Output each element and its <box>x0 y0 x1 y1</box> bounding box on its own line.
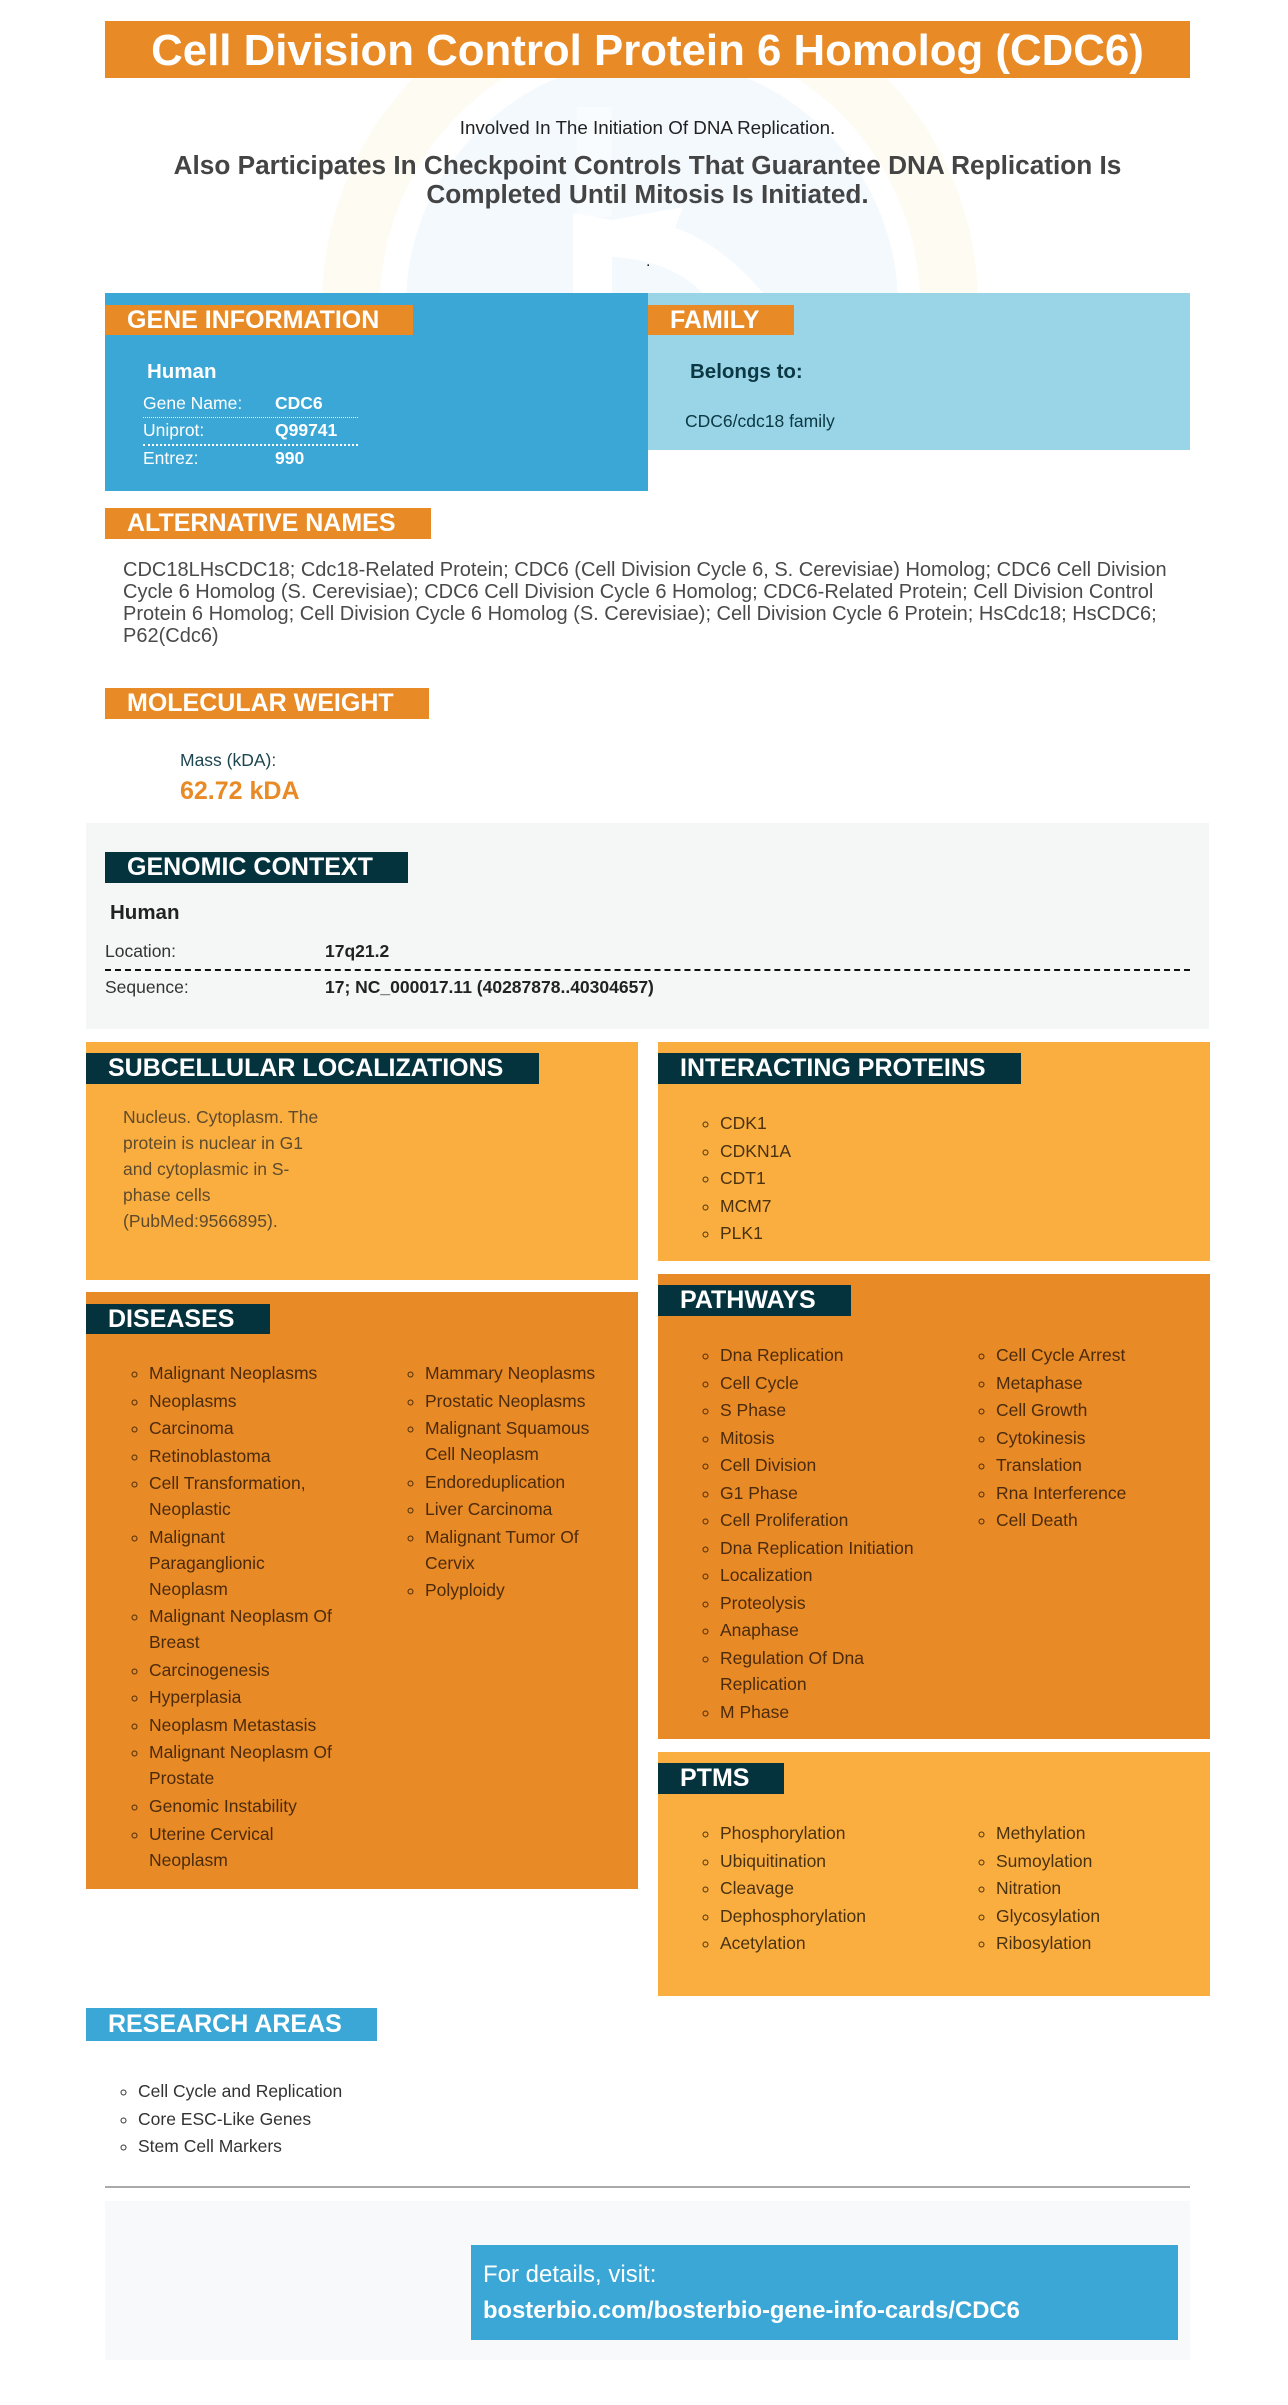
heading: pathways <box>658 1285 851 1316</box>
callout label: For details, visit: <box>483 2261 656 2288</box>
list: proteins <box>702 1113 791 1243</box>
callout url: bosterbio.com/bosterbio-gene-info-cards/CDC6 <box>483 2297 1020 2324</box>
list: diseases column 1: Cell Transformation, <box>149 1473 306 1493</box>
list: ptms column 1: Phosphorylation <box>720 1823 846 1843</box>
summary highlight <box>174 150 1121 209</box>
heading: family <box>648 305 794 335</box>
text: alternative names: CDC18LHsCDC18; Cdc18-Related Protein; CDC6 (Cell Division Cycle 6, S. Cerevisiae) Homolog; CDC6 Cell Division <box>123 559 1167 581</box>
list: pathways column 1: Mitosis <box>720 1428 774 1448</box>
list: diseases column 1: Retinoblastoma <box>149 1446 271 1466</box>
panel: gene information <box>105 293 648 491</box>
text: localization: phase cells <box>123 1185 211 1205</box>
list: ptms column 1: Acetylation <box>720 1933 806 1953</box>
text: alternative names: Protein 6 Homolog; Cell Division Cycle 6 Homolog (S. Cerevisiae); Cell Division Cycle 6 Protein; HsCdc18; HsCDC6; <box>123 603 1157 625</box>
list: research areas: Stem Cell Markers <box>138 2136 282 2156</box>
text: localization: protein is nuclear in G1 <box>123 1133 303 1153</box>
heading: ptms <box>658 1763 784 1794</box>
summary line: Involved In The Initiation Of DNA Replication. <box>460 117 835 138</box>
list: ptms column 1: Ubiquitination <box>720 1851 826 1871</box>
list: diseases column 1: Carcinoma <box>149 1418 234 1438</box>
list: pathways column 1: Dna Replication Initiation <box>720 1538 914 1558</box>
mass label: Mass (kDA): <box>180 750 276 770</box>
list: diseases column 2: Cell Neoplasm <box>425 1444 539 1464</box>
list: diseases column 1 <box>132 1363 332 1870</box>
list: diseases column 1: Breast <box>149 1632 200 1652</box>
list: diseases column 2: Endoreduplication <box>425 1472 565 1492</box>
list: ptms column 2: Nitration <box>996 1878 1061 1898</box>
list: pathways column 1: Cell Division <box>720 1455 816 1475</box>
list: pathways column 1: M Phase <box>720 1702 789 1722</box>
list: pathways column 1: Localization <box>720 1565 812 1585</box>
heading: interacting proteins: INTERACTING PROTEINS <box>680 1054 986 1082</box>
list: diseases column 1: Malignant Neoplasms <box>149 1363 317 1383</box>
text: localization <box>123 1107 318 1231</box>
list: diseases column 1: Hyperplasia <box>149 1687 241 1707</box>
list: diseases column 1: Malignant <box>149 1527 225 1547</box>
list: proteins: CDT1 <box>720 1168 766 1188</box>
text: alternative names: Cycle 6 Homolog (S. Cerevisiae); CDC6 Cell Division Cycle 6 Homolog; CDC6-Related Protein; Cell Division Control <box>123 581 1153 603</box>
list: pathways column 1 <box>702 1345 914 1722</box>
small dot: . <box>646 253 650 270</box>
heading: alternative names: ALTERNATIVE NAMES <box>127 509 396 537</box>
heading: ptms: PTMS <box>680 1764 749 1792</box>
uniprot row: Q99741 <box>275 420 337 440</box>
list: diseases column 1: Genomic Instability <box>149 1796 297 1816</box>
list: ptms column 1: Cleavage <box>720 1878 794 1898</box>
list: ptms column 1: Dephosphorylation <box>720 1906 866 1926</box>
list: ptms column 1 <box>702 1823 866 1953</box>
uniprot row: Uniprot: <box>143 420 204 440</box>
list: pathways column 1: Dna Replication <box>720 1345 844 1365</box>
list: diseases column 1: Neoplastic <box>149 1499 231 1519</box>
callout: details link <box>471 2245 1178 2340</box>
summary highlight: Also Participates In Checkpoint Controls That Guarantee DNA Replication Is <box>174 150 1121 180</box>
panel: interacting proteins <box>658 1042 1210 1261</box>
list: diseases column 2: Liver Carcinoma <box>425 1499 552 1519</box>
list: pathways column 2: Cell Growth <box>996 1400 1087 1420</box>
panel: subcellular localizations <box>86 1042 638 1280</box>
summary highlight: Completed Until Mitosis Is Initiated. <box>426 179 869 209</box>
background watermark logo <box>322 78 978 293</box>
list: pathways column 1: Cell Cycle <box>720 1373 799 1393</box>
panel: genomic context <box>86 823 1209 1029</box>
gene name row <box>143 390 358 418</box>
list: ptms column 2: Methylation <box>996 1823 1086 1843</box>
location row <box>105 938 1190 971</box>
list: diseases column 2: Cervix <box>425 1553 475 1573</box>
list: research areas: Cell Cycle and Replication <box>138 2081 342 2101</box>
sequence row: Sequence: <box>105 977 189 997</box>
list: ptms column 2 <box>978 1823 1100 1953</box>
heading: research areas: RESEARCH AREAS <box>108 2010 342 2038</box>
text: localization: Nucleus. Cytoplasm. The <box>123 1107 318 1127</box>
list: proteins: MCM7 <box>720 1196 772 1216</box>
gene name row: CDC6 <box>275 393 323 413</box>
title banner: Cell Division Control Protein 6 Homolog (CDC6) <box>151 26 1144 75</box>
list: diseases column 1: Malignant Neoplasm Of <box>149 1742 332 1762</box>
sequence row: 17; NC_000017.11 (40287878..40304657) <box>325 977 654 997</box>
list: diseases column 1: Uterine Cervical <box>149 1824 273 1844</box>
list: pathways column 1: G1 Phase <box>720 1483 798 1503</box>
list: ptms column 2: Ribosylation <box>996 1933 1091 1953</box>
list: pathways column 2: Rna Interference <box>996 1483 1126 1503</box>
list: proteins: PLK1 <box>720 1223 763 1243</box>
species label: Human <box>147 360 216 383</box>
list: diseases column 1: Carcinogenesis <box>149 1660 270 1680</box>
text: localization: and cytoplasmic in S- <box>123 1159 289 1179</box>
list: proteins: CDK1 <box>720 1113 767 1133</box>
list: proteins: CDKN1A <box>720 1141 791 1161</box>
heading: gene information: GENE INFORMATION <box>127 306 379 334</box>
heading: molecular weight: MOLECULAR WEIGHT <box>127 689 394 717</box>
list: diseases column 1: Neoplasm <box>149 1579 228 1599</box>
heading: subcellular localizations: SUBCELLULAR LOCALIZATIONS <box>108 1054 503 1082</box>
list: diseases column 2: Malignant Tumor Of <box>425 1527 579 1547</box>
gene name row: Gene Name: <box>143 393 242 413</box>
list: diseases column 1: Prostate <box>149 1768 214 1788</box>
list: diseases column 2: Polyploidy <box>425 1580 505 1600</box>
text: alternative names <box>123 559 1167 647</box>
panel: ptms <box>658 1752 1210 1996</box>
location row: Location: <box>105 941 176 961</box>
location row: 17q21.2 <box>325 941 389 961</box>
list: diseases column 2: Malignant Squamous <box>425 1418 589 1438</box>
panel: pathways <box>658 1274 1210 1739</box>
list: ptms column 2: Sumoylation <box>996 1851 1092 1871</box>
belongs to label: Belongs to: <box>690 360 803 383</box>
list: diseases column 1: Neoplasm <box>149 1850 228 1870</box>
heading: family: FAMILY <box>670 306 759 334</box>
list: diseases column 1: Neoplasms <box>149 1391 237 1411</box>
list: pathways column 2 <box>978 1345 1126 1530</box>
mass value: 62.72 kDA <box>180 777 300 805</box>
list: diseases column 2: Mammary Neoplasms <box>425 1363 595 1383</box>
heading: pathways: PATHWAYS <box>680 1286 816 1314</box>
list: pathways column 2: Translation <box>996 1455 1082 1475</box>
list: pathways column 1: Regulation Of Dna <box>720 1648 864 1668</box>
heading: diseases <box>86 1304 270 1334</box>
list: pathways column 2: Metaphase <box>996 1373 1083 1393</box>
uniprot row <box>143 417 358 446</box>
list: pathways column 1: Replication <box>720 1674 807 1694</box>
panel: footer <box>105 2201 1190 2360</box>
list: diseases column 2: Prostatic Neoplasms <box>425 1391 585 1411</box>
list: pathways column 1: Anaphase <box>720 1620 799 1640</box>
list: diseases column 1: Neoplasm Metastasis <box>149 1715 316 1735</box>
entrez row: Entrez: <box>143 448 198 468</box>
list: diseases column 1: Malignant Neoplasm Of <box>149 1606 332 1626</box>
list: diseases column 1: Paraganglionic <box>149 1553 265 1573</box>
text: localization: (PubMed:9566895). <box>123 1211 278 1231</box>
entrez row: 990 <box>275 448 304 468</box>
heading: genomic context: GENOMIC CONTEXT <box>127 853 373 881</box>
list: pathways column 2: Cell Death <box>996 1510 1078 1530</box>
panel: diseases <box>86 1292 638 1889</box>
species label: Human <box>110 901 179 924</box>
text: alternative names: P62(Cdc6) <box>123 625 219 647</box>
list: diseases column 2 <box>408 1363 595 1600</box>
list: pathways column 1: Proteolysis <box>720 1593 806 1613</box>
list: pathways column 1: S Phase <box>720 1400 786 1420</box>
list: ptms column 2: Glycosylation <box>996 1906 1100 1926</box>
panel: family <box>648 293 1190 450</box>
list: research areas: Core ESC-Like Genes <box>138 2109 311 2129</box>
list: pathways column 2: Cell Cycle Arrest <box>996 1345 1125 1365</box>
list: research areas <box>120 2081 342 2156</box>
family value: CDC6/cdc18 family <box>685 411 835 431</box>
sequence row <box>105 977 654 997</box>
list: pathways column 2: Cytokinesis <box>996 1428 1085 1448</box>
heading: diseases: DISEASES <box>108 1305 234 1333</box>
list: pathways column 1: Cell Proliferation <box>720 1510 848 1530</box>
heading: research areas <box>86 2008 377 2041</box>
entrez row <box>143 448 304 468</box>
